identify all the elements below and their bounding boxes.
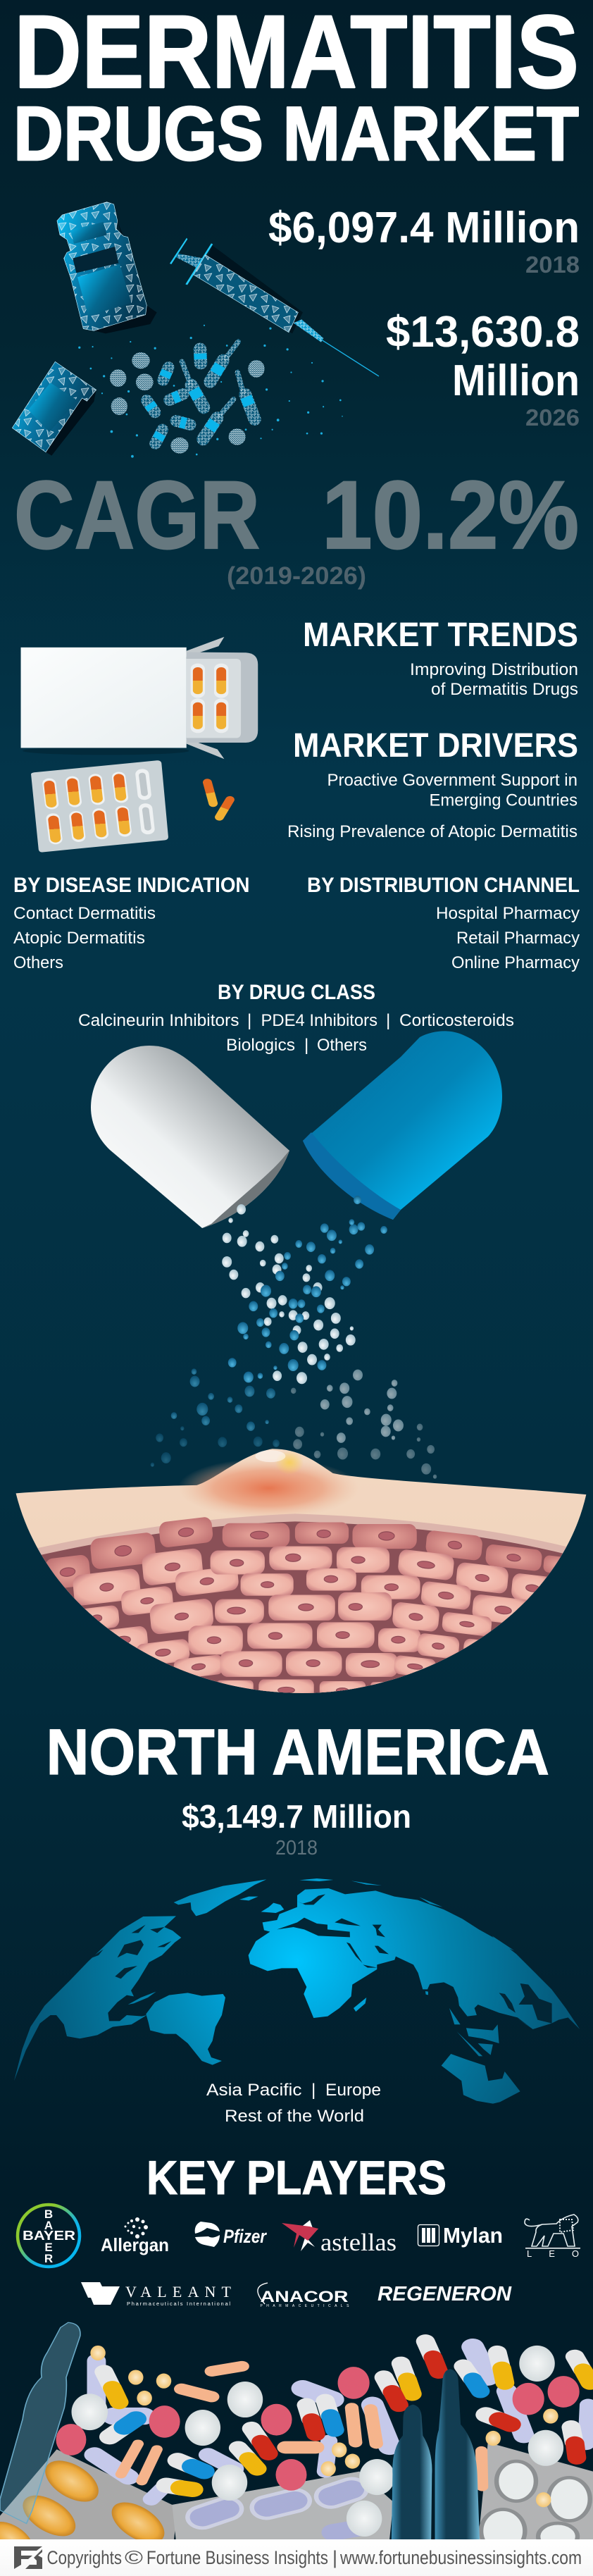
footer bar — [0, 2539, 593, 2576]
logo: astellas: astellas — [320, 2229, 397, 2256]
icon: vial — [57, 202, 157, 333]
blister packs — [0, 2442, 593, 2560]
regional leader: 2018 — [275, 1837, 318, 1859]
left cells — [46, 1517, 239, 1677]
market size 2026: $13,630.8 — [386, 308, 580, 357]
logo: mylan: Mylan — [443, 2223, 503, 2248]
by drug class: Corticosteroids — [399, 1011, 514, 1030]
footer logo — [14, 2546, 42, 2569]
by distribution channel: Hospital Pharmacy — [436, 904, 580, 923]
sparkles — [78, 325, 343, 458]
by drug class: | — [386, 1011, 390, 1030]
logo: valeant — [81, 2282, 232, 2307]
capsules: white halves — [104, 2341, 582, 2487]
north america — [14, 1916, 181, 2081]
south america — [146, 1993, 225, 2065]
logo: mylan — [418, 2223, 503, 2248]
by drug class: | — [304, 1036, 308, 1055]
by disease indication — [13, 874, 249, 972]
title — [13, 0, 579, 177]
logo: bayer: BAYER — [23, 2229, 75, 2243]
footer copyright text: Copyrights — [46, 2547, 122, 2568]
market size 2026 — [386, 308, 580, 431]
other regions: | — [311, 2081, 316, 2100]
CAGR: 10.2% — [322, 462, 579, 569]
logo: pfizer — [195, 2222, 267, 2247]
key players heading: KEY PLAYERS — [146, 2151, 447, 2205]
market size 2018: $6,097.4 Million — [268, 204, 580, 252]
market drivers: MARKET DRIVERS — [293, 727, 578, 764]
madagascar and sri lanka — [354, 1991, 428, 2012]
footer copyright text: Fortune Business Insights — [146, 2547, 328, 2568]
market size 2018: 2018 — [525, 252, 580, 278]
by drug class: Biologics — [226, 1036, 295, 1055]
market trends: Improving Distribution — [410, 660, 578, 679]
capsules: blue halves — [124, 2379, 480, 2472]
CAGR — [14, 462, 579, 590]
illustration: pill box and blisters — [21, 637, 258, 852]
powder particles: white — [222, 1204, 437, 1479]
market drivers: Rising Prevalence of Atopic Dermatitis — [287, 822, 578, 841]
logo: bayer: R — [44, 2252, 53, 2265]
market size 2026: 2026 — [525, 404, 580, 431]
logo: anacor: ANACOR — [261, 2288, 349, 2305]
by drug class: PDE4 Inhibitors — [261, 1011, 377, 1030]
logo: valeant: Pharmaceuticals International — [127, 2301, 230, 2307]
market trends — [303, 617, 578, 699]
hudson bay and great lakes — [89, 1925, 171, 1979]
icon: white capsule opening — [202, 1151, 289, 1228]
logo: pfizer: Pfizer — [223, 2226, 267, 2247]
icon: white capsule half — [91, 1046, 289, 1228]
by distribution channel — [307, 874, 580, 972]
CAGR: CAGR — [14, 462, 260, 569]
market drivers — [287, 727, 578, 841]
pink tablets — [56, 2367, 580, 2491]
pills — [110, 342, 265, 454]
by disease indication: Others — [13, 953, 63, 972]
australia — [442, 2054, 520, 2104]
market drivers: Proactive Government Support in — [327, 771, 578, 790]
logo: anacor — [258, 2283, 349, 2308]
logo: bayer: B — [44, 2207, 53, 2221]
logo: allergan: Allergan — [101, 2234, 169, 2255]
by disease indication: Atopic Dermatitis — [13, 929, 145, 948]
southeast asia islands — [449, 2008, 533, 2056]
icon: small vial — [12, 361, 96, 456]
illustration: scattered pills and blister packs — [0, 2322, 593, 2560]
regional leader: $3,149.7 Million — [182, 1798, 411, 1835]
CAGR: (2019-2026) — [227, 562, 366, 590]
africa and eurasia — [249, 1888, 580, 2029]
skin surface with lesion — [16, 1449, 586, 1693]
icon: loose capsules — [202, 778, 236, 822]
world globe map — [14, 1878, 580, 2104]
icon: blue capsule collar — [303, 1132, 401, 1220]
market trends: MARKET TRENDS — [303, 617, 578, 654]
skin cell layer — [32, 1513, 579, 1706]
regional leader — [46, 1716, 549, 1859]
other regions — [206, 2081, 381, 2126]
icon: open carton — [21, 637, 258, 759]
illustration: open capsule — [91, 1031, 502, 1479]
lavender tablets — [94, 2347, 588, 2499]
market size 2026: Million — [452, 357, 580, 405]
logo: leo: LEO — [527, 2248, 579, 2259]
ampoules — [0, 2322, 480, 2539]
by drug class: BY DRUG CLASS — [218, 981, 375, 1004]
other regions: Europe — [325, 2081, 381, 2100]
icon: blister pack — [31, 760, 168, 852]
icon: blue capsule half — [303, 1031, 502, 1220]
centre cells — [188, 1523, 420, 1698]
by drug class: Calcineurin Inhibitors — [78, 1011, 239, 1030]
by drug class: | — [247, 1011, 251, 1030]
footer copyright text: | — [332, 2547, 337, 2568]
logo: bayer: A — [44, 2219, 53, 2232]
logo: regeneron: REGENERON — [377, 2283, 512, 2305]
illustration: polygonal vials, syringe and pills — [12, 202, 379, 456]
logo: astellas — [282, 2220, 397, 2256]
logo: valeant: VALEANT — [125, 2283, 232, 2301]
right cells — [392, 1530, 561, 1676]
by distribution channel: Online Pharmacy — [451, 953, 580, 972]
uk — [261, 1903, 284, 1913]
illustration: skin cross-section — [16, 1449, 586, 1706]
by distribution channel: Retail Pharmacy — [456, 929, 580, 948]
by drug class — [78, 981, 514, 1055]
logo: anacor: PHARMACEUTICALS — [261, 2304, 349, 2308]
arctic islands — [299, 1878, 514, 1950]
iceland — [239, 1897, 258, 1900]
regional leader: NORTH AMERICA — [46, 1716, 549, 1788]
market trends: of Dermatitis Drugs — [431, 680, 578, 699]
capsules: red halves — [261, 2358, 577, 2458]
by drug class: Others — [317, 1036, 367, 1055]
market drivers: Emerging Countries — [430, 791, 578, 810]
icon: syringe — [170, 238, 379, 376]
by distribution channel: BY DISTRIBUTION CHANNEL — [307, 874, 580, 897]
caribbean — [128, 1992, 156, 2005]
orange tablets — [121, 2366, 482, 2487]
footer copyright text: © — [125, 2547, 143, 2568]
market size 2018 — [268, 204, 580, 278]
logo: bayer: E — [44, 2241, 53, 2254]
logo: bayer — [18, 2205, 80, 2267]
other regions: Rest of the World — [225, 2107, 364, 2126]
logo: leo — [525, 2215, 580, 2259]
footer copyright text — [46, 2547, 582, 2568]
by disease indication: BY DISEASE INDICATION — [13, 874, 249, 897]
other regions: Asia Pacific — [206, 2081, 301, 2100]
logo: allergan — [101, 2217, 169, 2255]
greenland — [174, 1879, 266, 1916]
white tablets — [71, 2346, 563, 2537]
small yellow tablets — [90, 2346, 558, 2507]
capsules: yellow halves — [112, 2368, 590, 2489]
by disease indication: Contact Dermatitis — [13, 904, 156, 923]
powder particles: blue — [151, 1196, 387, 1467]
seas — [277, 1894, 552, 2024]
